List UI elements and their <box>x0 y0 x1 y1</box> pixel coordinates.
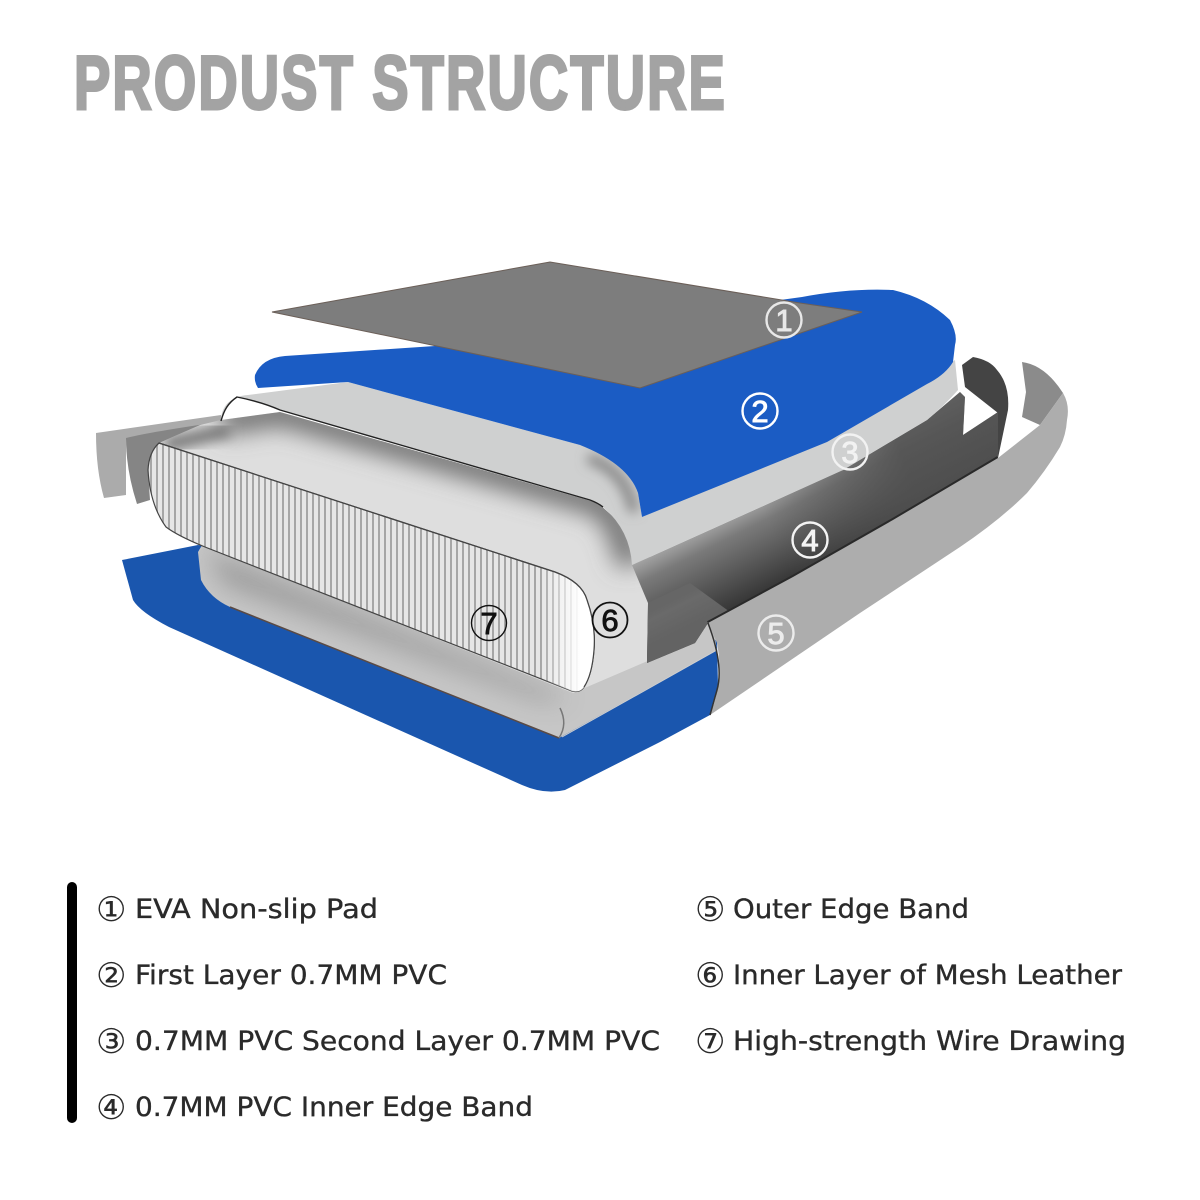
legend item 4 <box>96 1088 533 1128</box>
legend item 7 <box>695 1022 1126 1062</box>
marker 4: 4 <box>801 523 819 558</box>
layer: inner edge band, left end <box>126 422 219 504</box>
legend item 1: ① <box>96 890 126 930</box>
marker 5 <box>758 616 794 651</box>
marker 7 <box>472 606 506 641</box>
legend item 6: Inner Layer of Mesh Leather <box>733 960 1123 991</box>
legend item 2: First Layer 0.7MM PVC <box>135 960 447 991</box>
layer: inner mesh leather (6) <box>148 412 650 693</box>
legend: right column <box>695 890 1126 1062</box>
layer: EVA non-slip pad (1) <box>272 262 862 388</box>
legend item 5: ⑤ <box>695 890 725 930</box>
legend item 7: High-strength Wire Drawing <box>733 1026 1126 1057</box>
diagram: board cross-section <box>96 262 1068 792</box>
legend item 2: ② <box>96 956 126 996</box>
marker 7: 7 <box>480 606 498 641</box>
layer: lower light gray wrap <box>198 540 717 738</box>
legend bar <box>67 882 77 1123</box>
layer: bottom blue PVC <box>122 545 718 792</box>
legend item 1: EVA Non-slip Pad <box>135 894 378 925</box>
layer: first PVC blue (2) <box>255 290 956 517</box>
layer: outer edge band, left end <box>96 415 221 498</box>
layer: high-strength wire drawing face (7) <box>148 443 594 692</box>
legend item 2 <box>96 956 447 996</box>
marker 1: 1 <box>775 303 793 338</box>
marker 1 <box>766 302 802 338</box>
marker 5: 5 <box>767 616 785 651</box>
marker 2: 2 <box>751 394 769 429</box>
legend item 1 <box>96 890 378 930</box>
marker 3 <box>832 434 868 470</box>
legend item 6 <box>695 956 1123 996</box>
legend item 4: 0.7MM PVC Inner Edge Band <box>135 1092 533 1123</box>
marker 6: 6 <box>601 603 619 638</box>
layer: second PVC light gray (3) <box>221 360 958 565</box>
legend item 6: ⑥ <box>695 956 725 996</box>
marker 6 <box>592 602 628 638</box>
legend: left column <box>96 890 660 1128</box>
marker 2 <box>742 394 778 429</box>
title: PRODUST STRUCTURE <box>74 41 727 126</box>
marker 3: 3 <box>841 435 859 470</box>
legend item 3: ③ <box>96 1022 126 1062</box>
legend item 4: ④ <box>96 1088 126 1128</box>
legend item 7: ⑦ <box>695 1022 725 1062</box>
legend item 5 <box>695 890 969 930</box>
legend item 3: 0.7MM PVC Second Layer 0.7MM PVC <box>135 1026 660 1057</box>
legend item 5: Outer Edge Band <box>733 894 969 925</box>
legend item 3 <box>96 1022 660 1062</box>
layer: inner edge band (4) <box>632 357 1008 663</box>
layer: outer edge band (5) <box>708 362 1068 715</box>
marker 4 <box>792 522 828 558</box>
